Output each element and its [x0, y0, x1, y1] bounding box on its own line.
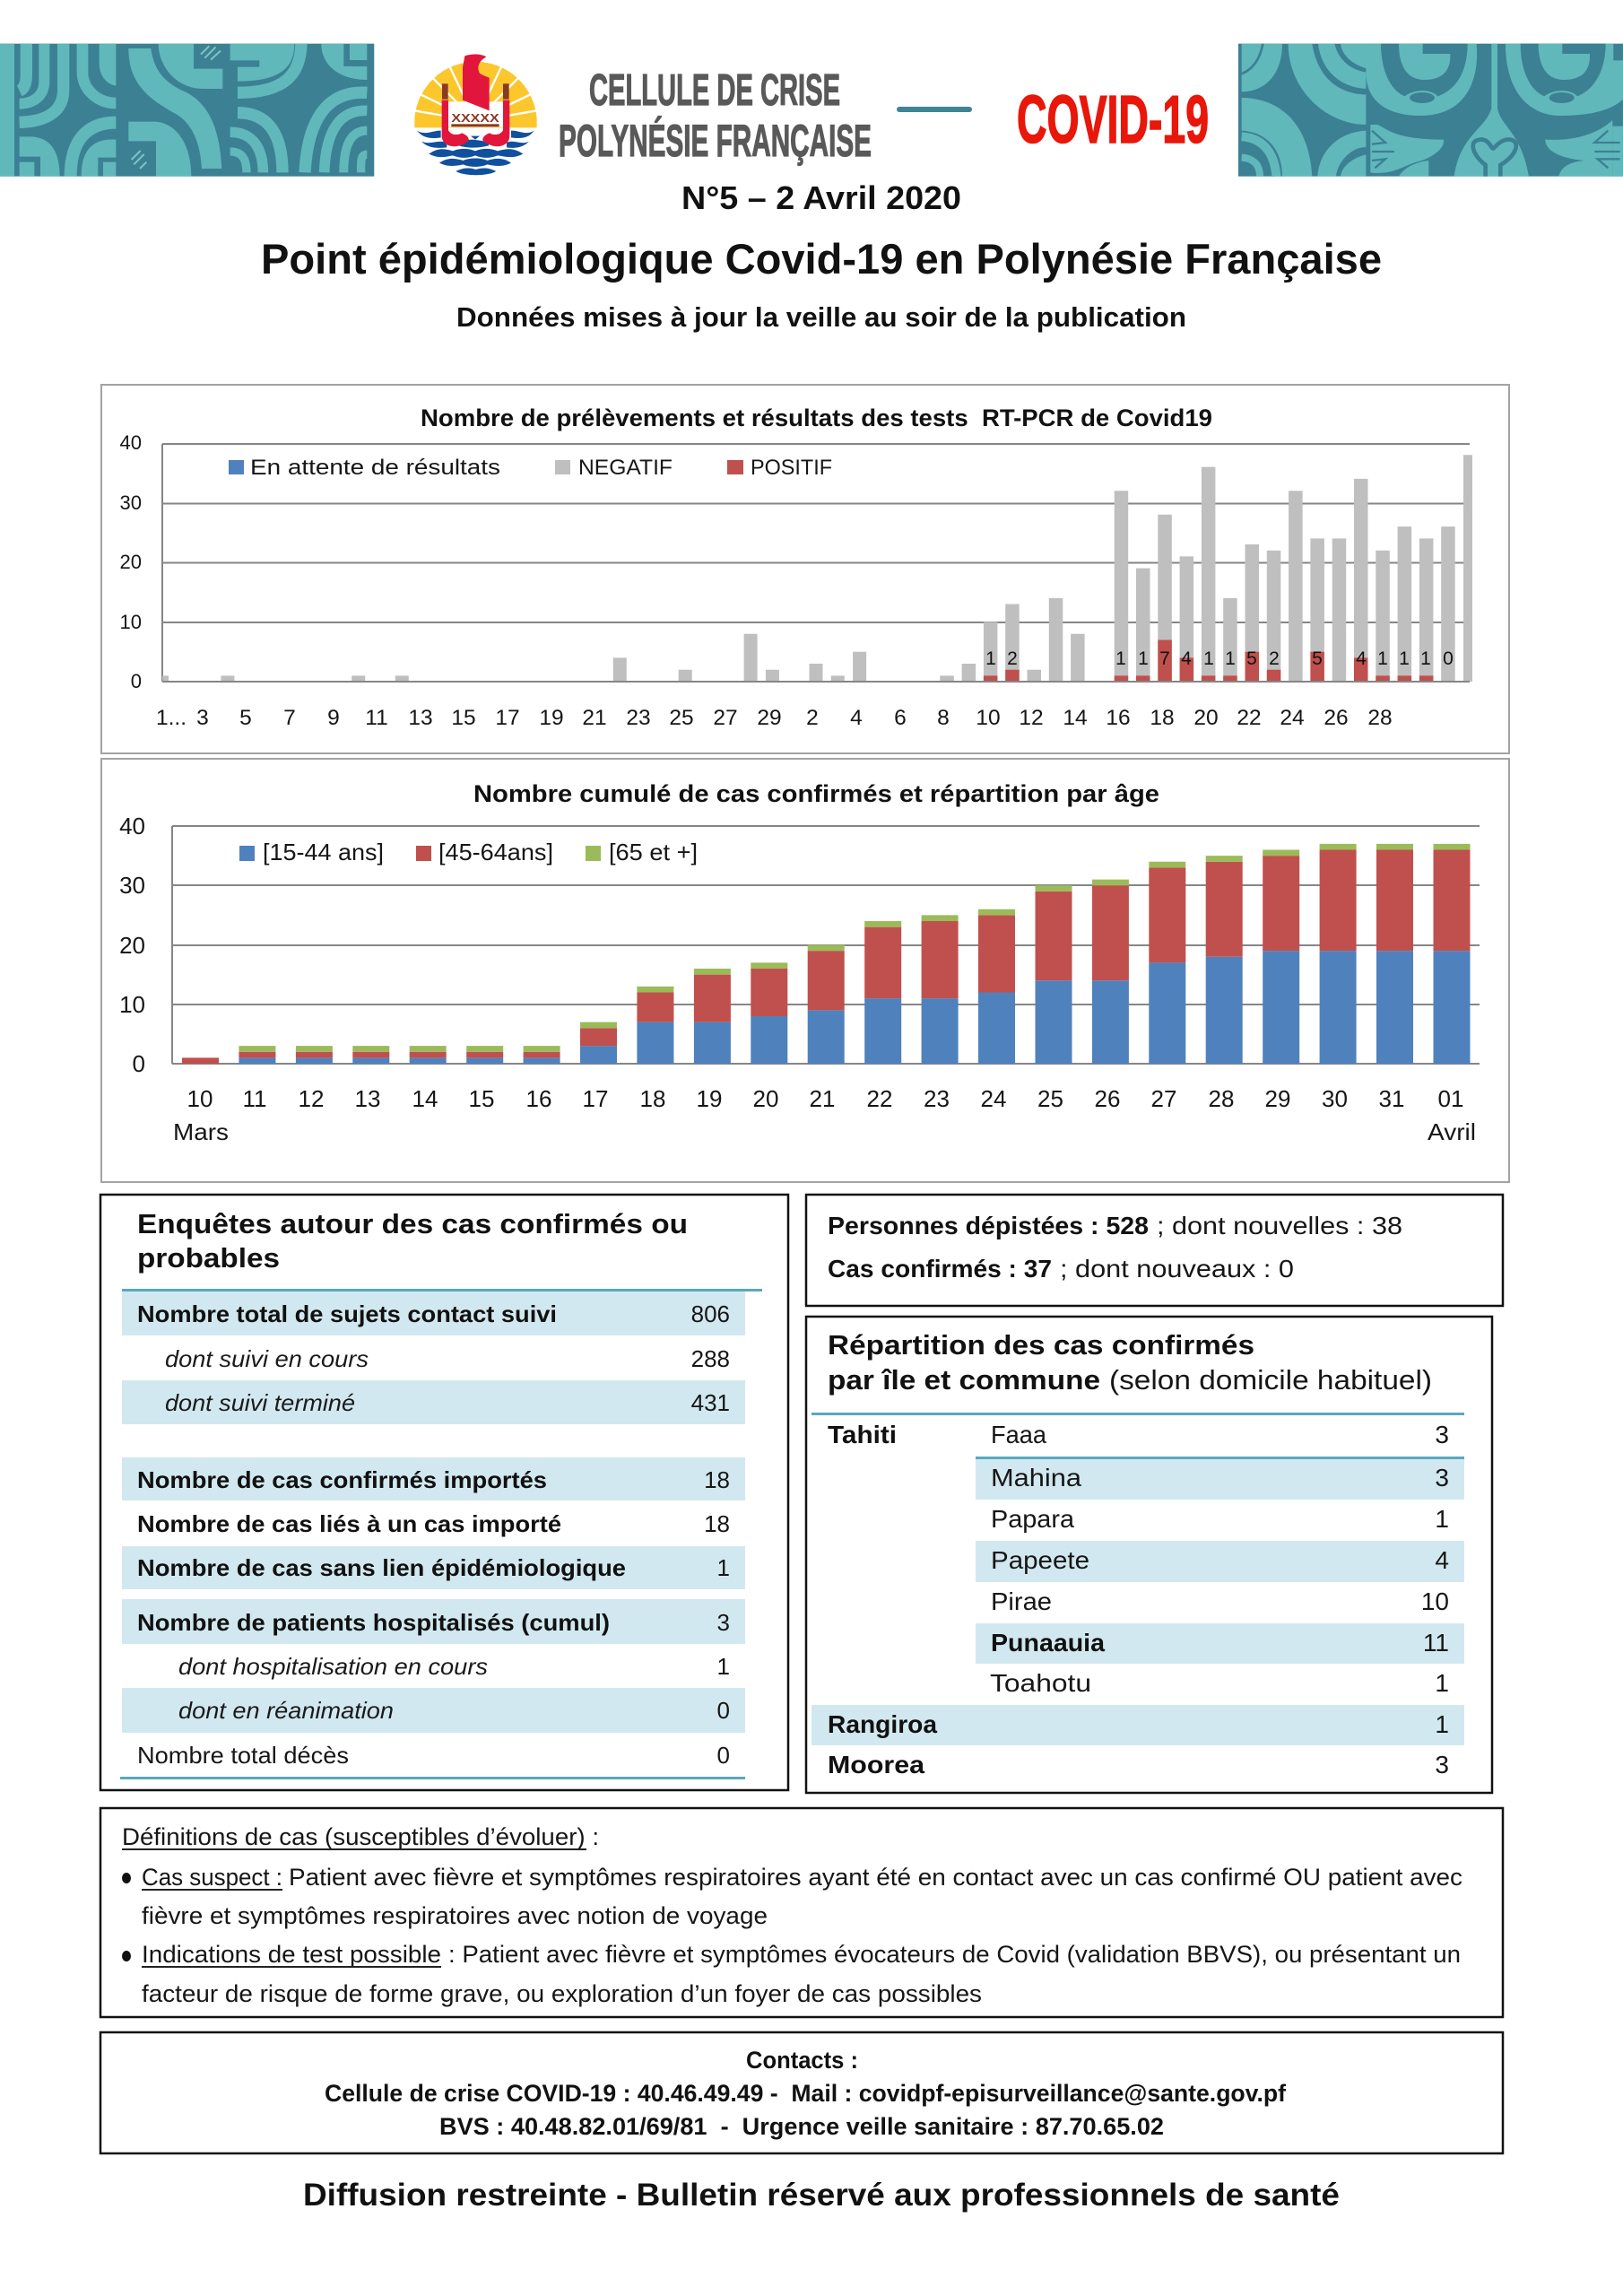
logo: coat of arms of French Polynesia	[414, 55, 537, 175]
y axis labels: cases	[119, 813, 145, 1077]
x axis labels: tests: 14	[1063, 706, 1088, 730]
subtitle: Données mises à jour la veille au soir de la publication	[456, 301, 1186, 333]
x axis labels: cases: 29	[1265, 1085, 1290, 1112]
x axis labels: cases: 21	[810, 1085, 835, 1112]
table rows: investigations: 0	[717, 1742, 730, 1769]
legend: tests: NEGATIF	[578, 456, 673, 480]
x axis labels: tests: 10	[976, 706, 1001, 730]
x axis labels: cases: 24	[981, 1085, 1006, 1112]
table rows: communes: 3	[1435, 1464, 1449, 1492]
table rows: communes: Mahina	[991, 1464, 1081, 1492]
x axis labels: tests: 5	[239, 706, 252, 730]
table rows: investigations: 806	[691, 1300, 730, 1327]
table rows: investigations: 18	[704, 1510, 730, 1537]
table rows: communes: Rangiroa	[828, 1710, 937, 1738]
x axis labels: cases: 16	[526, 1085, 551, 1112]
table rows: investigations: 431	[691, 1389, 730, 1416]
table rows: communes: Toahotu	[990, 1669, 1091, 1697]
table rows: communes: Punaauia	[991, 1629, 1105, 1657]
table rows: communes: 1	[1435, 1669, 1449, 1697]
data labels: positive counts: 1	[1377, 648, 1388, 669]
table rows: communes: 11	[1423, 1629, 1449, 1657]
x axis labels: cases: 10	[187, 1085, 213, 1112]
table rows: communes: Moorea	[828, 1751, 924, 1779]
x axis labels: tests: 18	[1150, 706, 1175, 730]
footer notice: Diffusion restreinte - Bulletin réservé aux professionnels de santé	[303, 2178, 1340, 2213]
data labels: positive counts: 4	[1356, 648, 1367, 669]
x axis labels: tests: 20	[1193, 706, 1219, 730]
data labels: positive counts: 7	[1159, 648, 1170, 669]
table rows: communes: 3	[1435, 1751, 1449, 1779]
panel: screening summary: ; dont nouveaux : 0	[1060, 1255, 1294, 1283]
table rows: investigations: dont suivi en cours	[165, 1345, 369, 1372]
table rows: investigations: dont suivi terminé	[165, 1389, 355, 1416]
panel heading: investigations	[137, 1208, 688, 1274]
x axis labels: cases: 27	[1151, 1085, 1176, 1112]
panel heading: distribution: Répartition des cas confirmés	[828, 1329, 1254, 1361]
legend: tests: En attente de résultats	[250, 456, 500, 480]
x axis labels: cases: 14	[412, 1085, 438, 1112]
data labels: positive counts: 5	[1246, 648, 1257, 669]
panel: tests chart	[101, 385, 1509, 753]
panel: screening summary: Personnes dépistées : 528	[828, 1212, 1149, 1239]
header pattern banner left	[0, 44, 374, 177]
x axis labels: cases: 20	[753, 1085, 778, 1112]
x axis labels: tests: 16	[1106, 706, 1131, 730]
x axis labels: cases: 25	[1037, 1085, 1063, 1112]
header heading: Cellule de crise: POLYNÉSIE FRANÇAISE	[559, 116, 872, 166]
header heading: Cellule de crise	[559, 66, 872, 166]
panel heading: investigations: probables	[137, 1242, 280, 1274]
chart title: cumulative cases: Nombre cumulé de cas confirmés et répartition par âge	[473, 780, 1159, 807]
legend: age groups: [15-44 ans]	[263, 839, 384, 865]
x axis labels: cases: 31	[1379, 1085, 1404, 1112]
panel: investigations around cases	[100, 1195, 788, 1790]
x axis labels: tests: 27	[713, 706, 738, 730]
x axis labels: cases: Avril	[1428, 1118, 1476, 1145]
panel: case definitions: Définitions de cas (susceptibles d’évoluer) :	[122, 1823, 599, 1850]
y axis labels: tests: 30	[120, 491, 142, 514]
table rows: investigations: Nombre de cas liés à un cas importé	[137, 1510, 561, 1537]
table rows: investigations: Nombre de cas sans lien épidémiologique	[137, 1554, 626, 1581]
x axis labels: cases	[173, 1085, 1476, 1145]
x axis labels: tests: 23	[626, 706, 651, 730]
x axis labels: tests: 3	[196, 706, 209, 730]
table rows: investigations: 0	[717, 1697, 730, 1724]
x axis labels: tests: 11	[365, 706, 388, 730]
x axis labels: tests: 7	[283, 706, 296, 730]
x axis labels: cases: Mars	[173, 1118, 229, 1145]
x axis labels: tests: 28	[1367, 706, 1393, 730]
legend: age groups: [65 et +]	[609, 839, 698, 865]
table rows: investigations: 18	[704, 1466, 730, 1493]
data labels: positive counts: 2	[1269, 648, 1280, 669]
x axis labels: tests: 2	[806, 706, 819, 730]
table rows: communes: Tahiti	[828, 1421, 897, 1448]
x axis labels: cases: 23	[924, 1085, 950, 1112]
x axis labels: cases: 28	[1209, 1085, 1234, 1112]
panel: case definitions: Patient avec fièvre et symptômes respiratoires ayant été en contact avec un cas confirmé OU patient avec	[289, 1864, 1462, 1891]
y axis labels: cases: 20	[119, 932, 145, 959]
table rows: communes: 4	[1435, 1546, 1449, 1574]
y axis labels: tests: 10	[120, 611, 142, 633]
data labels: positive counts: 2	[1007, 648, 1018, 669]
bars: positive tests	[984, 639, 1433, 682]
bars: age 45-64	[182, 850, 1471, 1064]
panel: contacts: Cellule de crise COVID-19 : 40.46.49.49 - Mail : covidpf-episurveillance@sante.gov.pf	[325, 2080, 1287, 2107]
y axis labels: cases: 30	[119, 872, 145, 899]
x axis labels: tests: 21	[582, 706, 607, 730]
panel heading: distribution: (selon domicile habituel)	[1109, 1364, 1432, 1396]
table rows: investigations: Nombre de patients hospitalisés (cumul)	[137, 1609, 610, 1636]
table rows: investigations: dont hospitalisation en cours	[178, 1653, 488, 1680]
data labels: positive counts: 1	[1399, 648, 1410, 669]
data labels: positive counts: 1	[985, 648, 996, 669]
x axis labels: tests	[156, 706, 1393, 730]
panel: screening summary	[806, 1195, 1503, 1306]
bars: age 65 and over	[239, 844, 1470, 1052]
x axis labels: tests: 13	[408, 706, 433, 730]
x axis labels: cases: 22	[867, 1085, 892, 1112]
x axis labels: cases: 01	[1438, 1085, 1463, 1112]
header dash	[897, 107, 972, 112]
panel heading: investigations: Enquêtes autour des cas confirmés ou	[137, 1208, 688, 1239]
x axis labels: tests: 24	[1280, 706, 1305, 730]
table rows: investigations: 288	[691, 1345, 730, 1372]
header pattern banner right	[1238, 44, 1623, 177]
data labels: positive counts: 1	[1203, 648, 1214, 669]
panel heading: distribution: par île et commune	[828, 1364, 1100, 1396]
x axis labels: cases: 12	[299, 1085, 324, 1112]
table rows: investigations: 1	[717, 1653, 730, 1680]
x axis labels: cases: 13	[355, 1085, 380, 1112]
panel: contacts	[100, 2032, 1503, 2153]
panel: contacts: Contacts :	[746, 2047, 858, 2074]
table rows: investigations: dont en réanimation	[178, 1697, 394, 1724]
x axis labels: tests: 1...	[156, 706, 187, 730]
x axis labels: tests: 9	[327, 706, 340, 730]
table rows: communes	[812, 1421, 1464, 1779]
bars: negative tests	[162, 455, 1472, 682]
x axis labels: cases: 30	[1322, 1085, 1348, 1112]
table rows: communes: Papeete	[991, 1546, 1089, 1574]
table rows: investigations: 1	[717, 1554, 730, 1581]
legend: age groups: [45-64ans]	[438, 839, 553, 865]
y axis labels: tests: 40	[120, 431, 142, 454]
data labels: positive counts: 1	[1115, 648, 1126, 669]
x axis labels: tests: 26	[1324, 706, 1349, 730]
x axis labels: cases: 17	[583, 1085, 608, 1112]
x axis labels: tests: 22	[1237, 706, 1262, 730]
header heading: COVID-19: COVID-19	[1017, 82, 1209, 157]
table rows: communes: 1	[1435, 1505, 1449, 1533]
table rows: communes: Pirae	[991, 1587, 1052, 1615]
panel: case definitions: Cas suspect :	[142, 1864, 282, 1891]
y axis labels: tests	[120, 431, 142, 692]
y axis labels: tests: 0	[131, 670, 142, 692]
x axis labels: cases: 26	[1095, 1085, 1120, 1112]
panel: case definitions: fièvre et symptômes respiratoires avec notion de voyage	[142, 1902, 768, 1929]
table rows: investigations: Nombre de cas confirmés importés	[137, 1466, 547, 1493]
data labels: positive counts: 4	[1181, 648, 1192, 669]
x axis labels: cases: 18	[640, 1085, 665, 1112]
x axis labels: cases: 15	[469, 1085, 494, 1112]
table rows: investigations	[122, 1292, 745, 1769]
x axis labels: tests: 25	[669, 706, 694, 730]
data labels: positive counts: 1	[1138, 648, 1149, 669]
data labels: positive counts: 5	[1312, 648, 1323, 669]
table rows: communes: Papara	[991, 1505, 1074, 1533]
x axis labels: tests: 19	[539, 706, 564, 730]
x axis labels: cases: 19	[697, 1085, 722, 1112]
panel: contacts: BVS : 40.48.82.01/69/81 - Urgence veille sanitaire : 87.70.65.02	[439, 2113, 1164, 2140]
panel: cumulative cases chart	[101, 759, 1509, 1182]
bars: age 15-44	[239, 951, 1470, 1064]
panel heading: distribution	[828, 1329, 1432, 1396]
table rows: communes: 1	[1435, 1710, 1449, 1738]
data labels: positive counts: 1	[1420, 648, 1431, 669]
y axis labels: cases: 10	[119, 991, 145, 1018]
x axis labels: tests: 6	[894, 706, 907, 730]
x axis labels: tests: 17	[495, 706, 520, 730]
x axis labels: cases: 11	[242, 1085, 267, 1112]
panel: screening summary: Cas confirmés : 37	[828, 1255, 1052, 1283]
x axis labels: tests: 12	[1019, 706, 1044, 730]
issue number: N°5 – 2 Avril 2020	[681, 179, 961, 216]
table rows: investigations: Nombre total de sujets contact suivi	[137, 1300, 557, 1327]
table rows: communes: Faaa	[991, 1421, 1046, 1448]
panel: case definitions	[100, 1808, 1503, 2017]
legend: age groups	[239, 839, 698, 865]
x axis labels: tests: 4	[850, 706, 863, 730]
y axis labels: cases: 0	[133, 1050, 145, 1077]
x axis labels: tests: 29	[757, 706, 782, 730]
panel: case definitions: : Patient avec fièvre et symptômes évocateurs de Covid (validation BBVS), ou présentant un	[448, 1941, 1461, 1968]
panel: screening summary: ; dont nouvelles : 38	[1157, 1212, 1402, 1239]
main title: Point épidémiologique Covid-19 en Polynésie Française	[261, 235, 1382, 283]
table rows: investigations: Nombre total décès	[137, 1742, 349, 1769]
data labels: positive counts: 1	[1225, 648, 1236, 669]
legend: tests	[229, 456, 832, 480]
y axis labels: tests: 20	[120, 551, 142, 573]
table rows: investigations: 3	[717, 1609, 730, 1636]
data labels: positive counts	[985, 648, 1454, 669]
x axis labels: tests: 15	[451, 706, 476, 730]
x axis labels: tests: 8	[937, 706, 950, 730]
legend: tests: POSITIF	[751, 456, 832, 480]
chart title: tests: Nombre de prélèvements et résultats des tests RT-PCR de Covid19	[421, 404, 1212, 431]
header heading: Cellule de crise: CELLULE DE CRISE	[589, 66, 840, 115]
panel: confirmed cases by island and commune	[806, 1317, 1492, 1793]
y axis labels: cases: 40	[119, 813, 145, 839]
data labels: positive counts: 0	[1443, 648, 1454, 669]
panel: case definitions: Indications de test possible	[142, 1941, 441, 1968]
panel: case definitions: facteur de risque de forme grave, ou exploration d’un foyer de cas possibles	[142, 1980, 982, 2007]
logo: coat of arms of French Polynesia: XXXXX	[451, 111, 499, 125]
table rows: communes: 3	[1435, 1421, 1449, 1448]
table rows: communes: 10	[1421, 1587, 1449, 1615]
